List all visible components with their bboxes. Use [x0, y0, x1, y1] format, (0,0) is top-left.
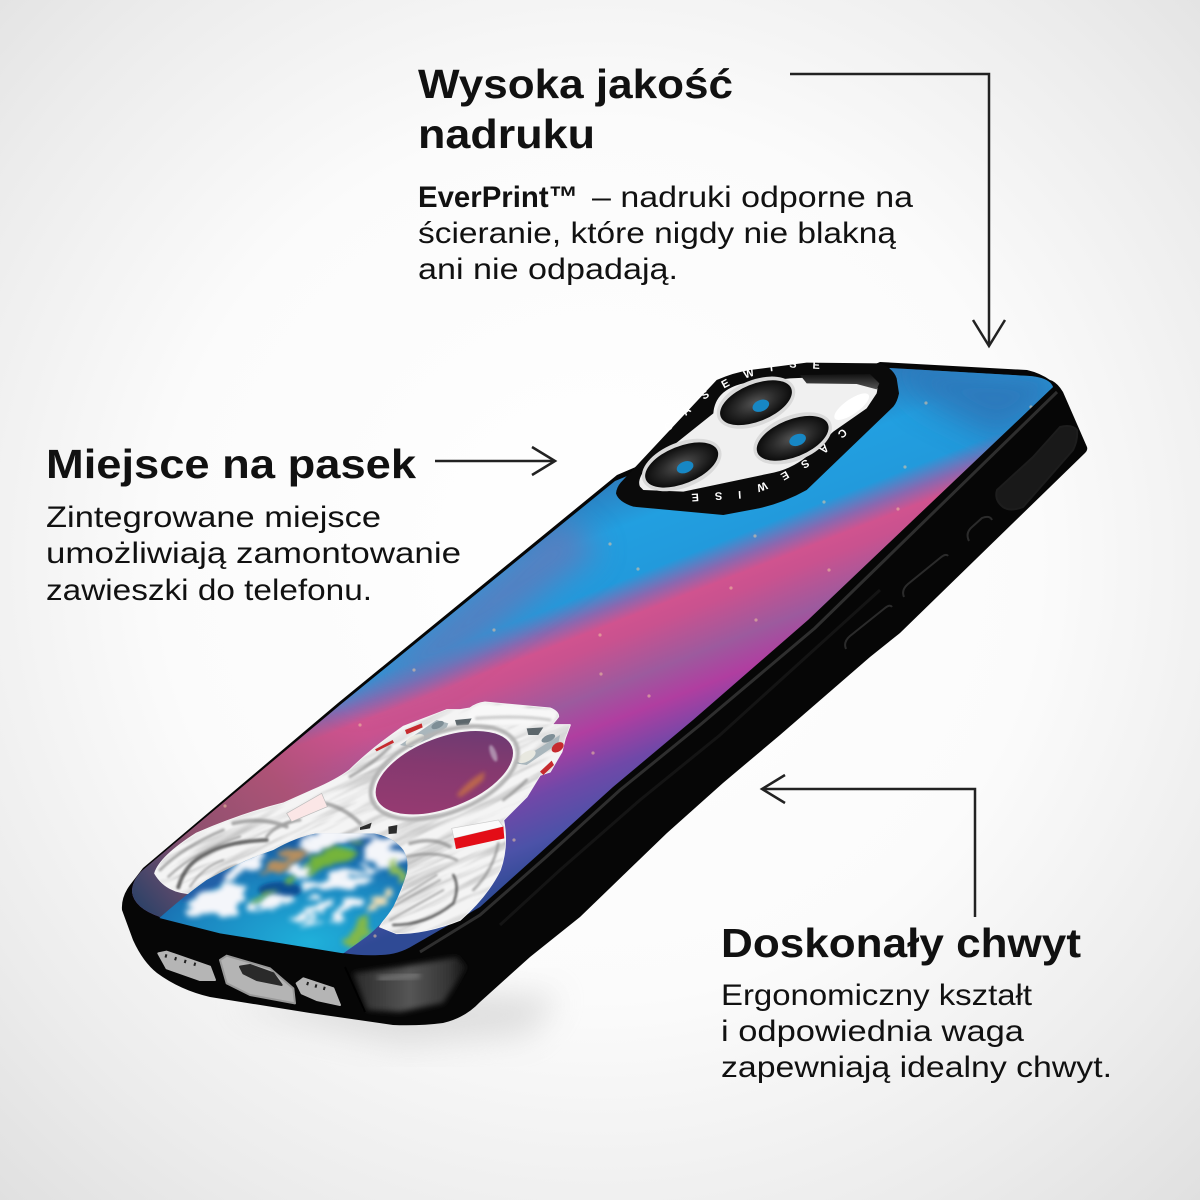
heading: Miejsce na pasek	[46, 441, 416, 487]
helmet cover highlight	[463, 704, 557, 726]
instrument plates	[400, 718, 560, 766]
body text: zawieszki do telefonu.	[46, 574, 372, 607]
suit streak texture	[160, 704, 570, 934]
right speaker grille	[297, 978, 340, 1005]
body text: Zintegrowane miejsce	[46, 501, 381, 534]
body text: umożliwiają zamontowanie	[46, 537, 461, 570]
arrow: to side grip	[762, 775, 975, 917]
helmet visor	[363, 713, 526, 833]
camera window	[639, 375, 877, 492]
visor reflection	[457, 772, 485, 797]
window shadow strip	[800, 374, 879, 389]
helmet ring shadow	[358, 708, 531, 838]
flag patch	[452, 820, 504, 849]
screen gradient	[132, 368, 1053, 956]
flash highlight	[831, 389, 873, 425]
desaturated blue on the left	[340, 515, 600, 705]
stars	[223, 401, 1033, 938]
callout: print quality	[418, 61, 913, 286]
charging port	[220, 956, 295, 1003]
shoulder patch	[287, 793, 327, 822]
suit shading folds	[160, 717, 550, 925]
phone floor shadow	[230, 990, 560, 1045]
lens right	[746, 402, 839, 475]
darker blue at top right	[901, 368, 1053, 442]
arrow: to print surface	[790, 74, 1005, 346]
arrow: to strap slot	[435, 447, 555, 475]
phone case	[122, 362, 1088, 1026]
body text: EverPrint™	[418, 181, 578, 214]
mauve lower left	[132, 715, 352, 917]
body text	[418, 181, 913, 286]
bump frame	[616, 363, 899, 515]
brand lettering top: CASEWISE	[670, 362, 820, 430]
body text	[46, 501, 461, 607]
brand lettering bottom: CASEWISE	[692, 430, 846, 502]
continents	[253, 842, 402, 952]
bottom ports	[158, 952, 340, 1005]
ocean patch	[335, 845, 355, 853]
body text: i odpowiednia waga	[721, 1015, 1024, 1048]
body text	[721, 979, 1112, 1084]
body text: Ergonomiczny kształt	[721, 979, 1033, 1012]
heading: Doskonały chwyt	[721, 920, 1081, 966]
body text: ani nie odpadają.	[418, 253, 678, 286]
corner reflection	[353, 957, 467, 1012]
heading	[418, 61, 733, 157]
callout: strap slot	[46, 441, 461, 607]
earth globe	[160, 833, 408, 954]
camera bump	[616, 363, 899, 515]
heading: nadruku	[418, 111, 595, 157]
visor highlight	[488, 744, 499, 763]
ocean shades	[182, 868, 303, 902]
lens top	[709, 366, 803, 439]
callout: grip	[721, 920, 1112, 1084]
lens left	[634, 428, 729, 502]
body text: ścieranie, które nigdy nie blakną	[418, 217, 896, 250]
astronaut illustration	[154, 702, 571, 954]
red suit buttons	[375, 723, 566, 775]
side rim and buttons	[420, 392, 1077, 952]
body text: – nadruki odporne na	[592, 181, 913, 214]
left speaker grille	[158, 952, 215, 980]
heading: Wysoka jakość	[418, 61, 733, 107]
chest connectors	[360, 823, 397, 834]
astronaut suit	[155, 702, 570, 933]
clouds	[180, 827, 408, 932]
body text: zapewniają idealny chwyt.	[721, 1051, 1112, 1084]
case body	[122, 362, 1087, 1025]
